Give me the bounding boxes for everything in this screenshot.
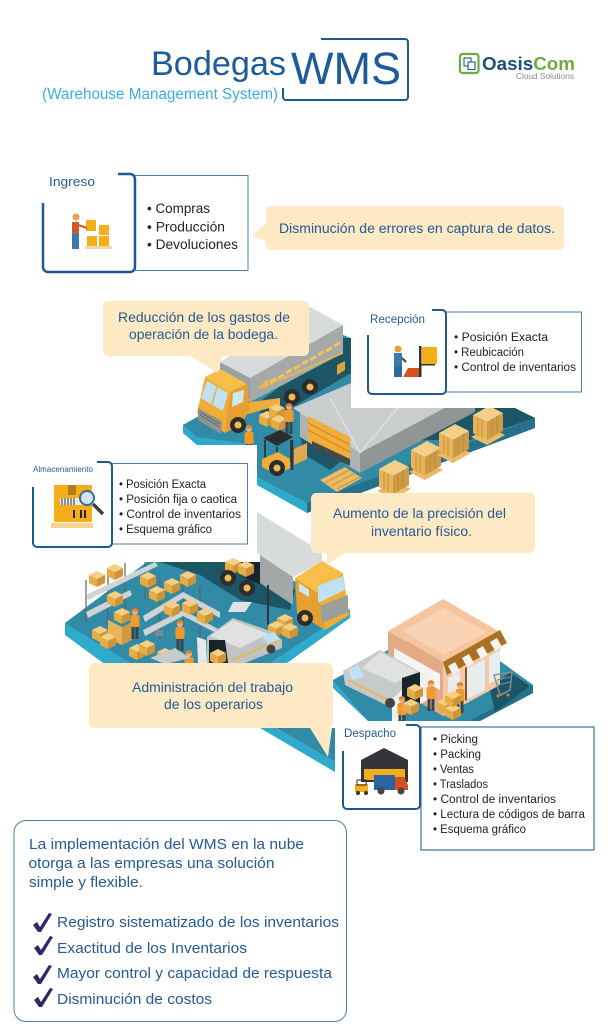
check item 4: Disminución de costos — [57, 992, 212, 1008]
shelves — [86, 562, 220, 640]
check item 2: Exactitud de los Inventarios — [57, 941, 247, 957]
panel: Ingreso: • Devoluciones — [147, 237, 238, 252]
callout: gastos: Reducción de los gastos de — [118, 310, 290, 325]
subtitle: (Warehouse Management System) — [42, 86, 278, 103]
pallet stacks — [377, 406, 505, 499]
icon: worker with pallet jack — [394, 346, 437, 377]
heading: Almacenamiento — [33, 464, 93, 474]
icon: warehouse and truck — [355, 748, 408, 795]
panel: Despacho: • Ventas — [433, 764, 474, 776]
callout: operarios: Administración del trabajo — [132, 680, 293, 695]
bracket — [33, 462, 112, 547]
panel: Despacho: • Packing — [433, 749, 481, 761]
panel: Almacenamiento — [33, 462, 248, 547]
callout: gastos — [103, 301, 309, 373]
white mask: Despacho area — [335, 721, 612, 851]
boxes on shelves — [89, 564, 213, 664]
callout: errores: Disminución de errores en captura de datos. — [279, 220, 555, 236]
panel: Almacenamiento: • Esquema gráfico — [119, 524, 212, 536]
panel: Despacho: • Control de inventarios — [433, 794, 556, 806]
panel: Despacho: • Lectura de códigos de barra — [433, 809, 586, 821]
delivery van — [197, 618, 282, 665]
truck cab — [197, 369, 318, 434]
bracket — [368, 310, 446, 394]
forklift — [262, 430, 307, 476]
workers — [130, 608, 194, 681]
icon: worker with boxes — [72, 214, 112, 249]
forklift and boxes — [228, 585, 298, 639]
bracket — [43, 174, 135, 272]
check item 2 — [34, 936, 247, 957]
bracket — [343, 725, 420, 809]
panel frame — [14, 820, 346, 1022]
truck trailer — [220, 307, 345, 415]
icon: box with magnifier — [51, 485, 103, 528]
check item 1: Registro sistematizado de los inventarios — [57, 915, 339, 931]
list items: • Compras — [147, 201, 210, 216]
panel: Recepción: • Reubicación — [454, 347, 524, 359]
illustration: warehouse platform with truck — [183, 307, 535, 513]
panel: Almacenamiento: • Control de inventarios — [119, 509, 241, 521]
scale table — [150, 630, 190, 664]
panel: Despacho: • Traslados — [433, 779, 488, 791]
check item 4 — [34, 988, 212, 1008]
warehouse building — [293, 383, 475, 473]
awning — [443, 630, 507, 675]
check item 3: Mayor control y capacidad de respuesta — [57, 966, 333, 982]
title — [42, 39, 408, 103]
list items: • Picking — [433, 734, 478, 746]
workers and boxes at store — [398, 680, 464, 727]
intro text: otorga a las empresas una solución — [28, 856, 274, 872]
illustration: picking floor with truck — [65, 512, 350, 681]
logo tagline: Cloud Solutions — [516, 72, 574, 81]
intro text — [28, 837, 304, 891]
title word WMS: WMS — [291, 43, 401, 94]
list box — [135, 176, 248, 270]
illustration: store platform — [333, 599, 533, 727]
title frame — [283, 39, 408, 100]
panel: Almacenamiento: • Posición fija o caotica — [119, 494, 238, 506]
intro text: simple y flexible. — [29, 875, 143, 891]
list box — [112, 464, 248, 544]
panel: Ingreso: • Producción — [147, 220, 225, 234]
store building — [388, 599, 500, 716]
callout: operarios — [89, 663, 333, 757]
panel: Recepción — [368, 310, 582, 394]
callout: precisión: Aumento de la precisión del — [333, 506, 506, 521]
delivery van — [343, 650, 428, 722]
truck trailer — [220, 512, 322, 605]
heading: Despacho — [344, 728, 396, 740]
title word Bodegas: Bodegas — [151, 45, 286, 83]
heading: Recepción — [370, 314, 425, 326]
logo icon — [460, 54, 478, 73]
truck cab — [295, 561, 349, 630]
list box — [446, 312, 582, 392]
list items: • Posición Exacta — [119, 479, 207, 491]
callout: precisión: inventario físico. — [371, 524, 472, 539]
heading: Ingreso — [49, 174, 95, 189]
workers and boxes by truck — [244, 403, 294, 456]
callout: gastos: operación de la bodega. — [129, 327, 278, 342]
shopping cart — [494, 672, 512, 698]
panel: Recepción: • Control de inventarios — [454, 362, 576, 374]
panel: Despacho: • Esquema gráfico — [433, 824, 526, 836]
platform corner under callout — [260, 728, 335, 772]
floor pallets — [320, 467, 362, 492]
logo wordmark: OasisCom — [482, 54, 575, 74]
list items: • Posición Exacta — [454, 332, 549, 344]
callout: operarios: de los operarios — [164, 697, 263, 712]
white mask: top right — [351, 295, 612, 408]
logo: OasisCom — [460, 54, 575, 81]
list box — [421, 727, 594, 850]
white mask: left — [0, 445, 257, 562]
panel: Ingreso — [43, 174, 248, 272]
intro text: La implementación del WMS en la nube — [29, 837, 304, 853]
panel: benefits — [14, 820, 346, 1022]
callout: precisión — [311, 493, 535, 565]
callout: errores — [252, 206, 564, 250]
panel: Despacho — [343, 725, 594, 850]
